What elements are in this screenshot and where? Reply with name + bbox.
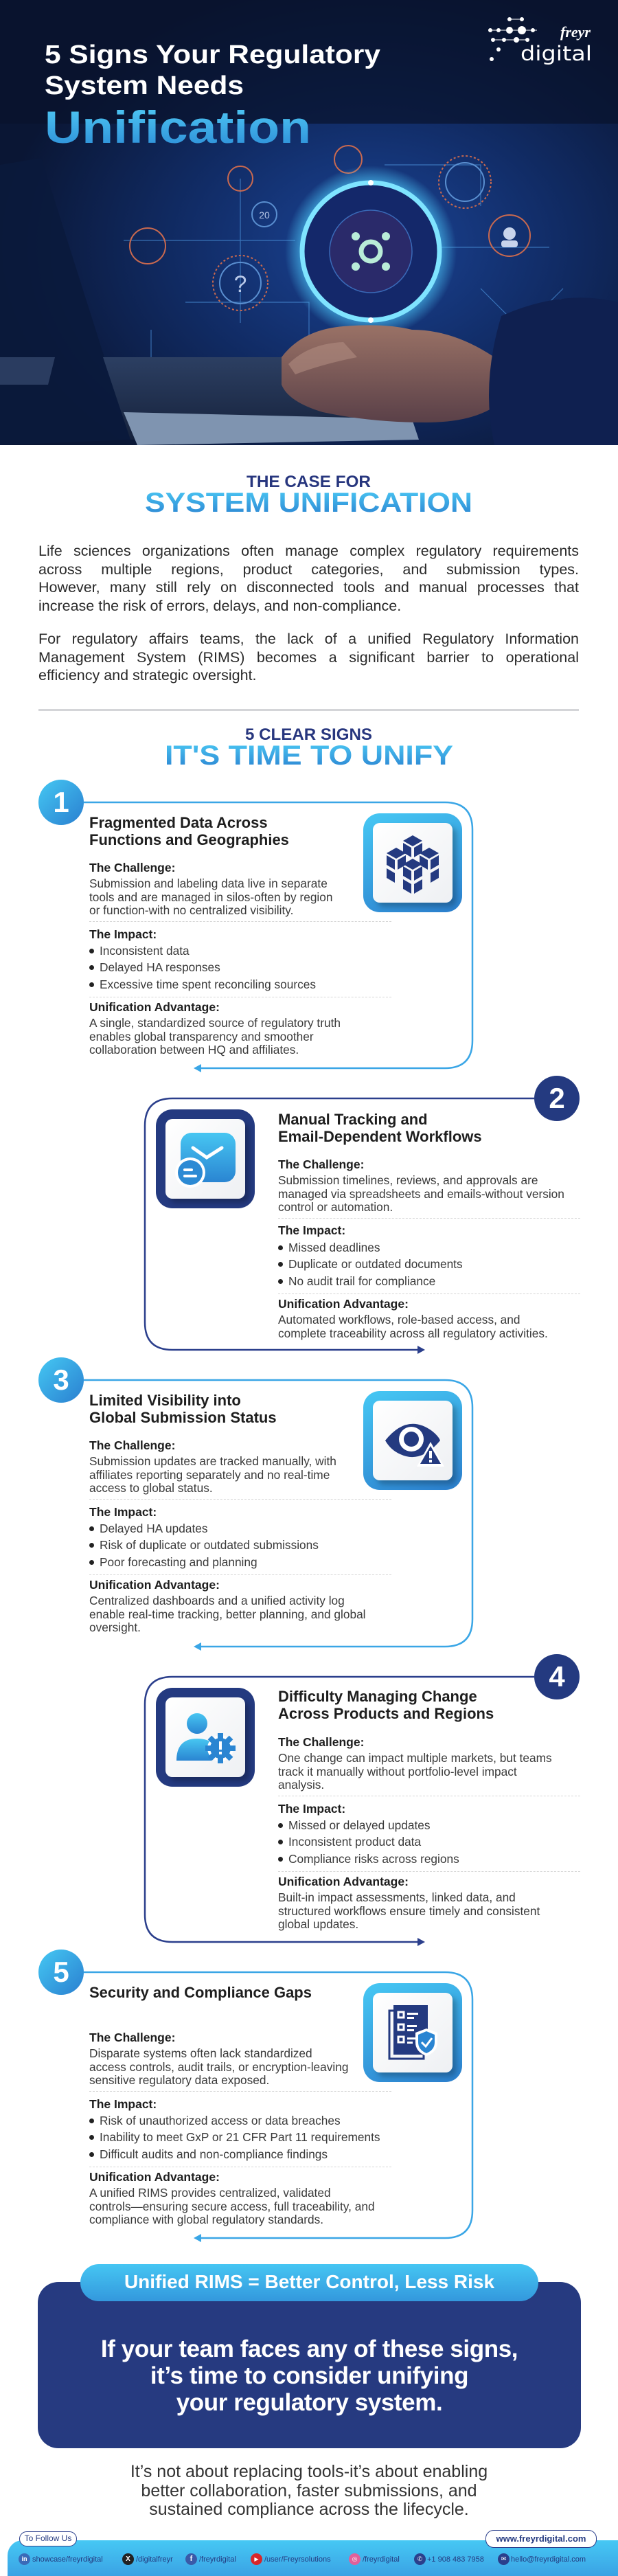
card 4: managing change [144,1654,580,1946]
pill: unified rims [80,2264,538,2301]
to follow us pill: To Follow Us [25,2533,71,2543]
contact row: ▶ [254,2556,259,2562]
challenge: The Challenge: [89,1438,175,1452]
impact: The Impact: [278,1223,345,1237]
card 2: manual tracking: Duplicate or outdated documents [288,1257,463,1271]
card 5: security gaps: access controls, audit trails, or encryption-leaving [89,2059,348,2073]
intro paragraph 2: efficiency and strategic oversight. [38,667,257,683]
card 1: fragmented data: Inconsistent data [100,944,190,958]
header hero image: ? [234,271,247,297]
logo: freyr [560,23,591,41]
number badge 1 [38,780,84,825]
intro paragraph 1: However, many still rely on disconnected tools and manual processes that [38,579,579,596]
contact row: +1 908 483 7958 [427,2555,484,2564]
challenge: The Challenge: [278,1735,364,1749]
contact row [19,2553,586,2565]
card 4: managing change: Built-in impact assessments, linked data, and [278,1890,516,1904]
card 5: security gaps: Disparate systems often lack standardized [89,2046,312,2060]
card 4: managing change: analysis. [278,1778,324,1792]
small icon circles [130,146,586,346]
closing statement [130,2462,488,2519]
conclusion text: If your team faces any of these signs, [101,2336,518,2362]
card 3: limited visibility [38,1357,474,1651]
title [278,1111,482,1144]
card 5: security gaps: compliance with global regulatory standards. [89,2213,323,2226]
logo [488,17,592,65]
contact row: /digitalfreyr [136,2555,173,2564]
title [89,814,289,848]
number badge 4 [534,1654,580,1699]
heading: 5 clear signs: 5 CLEAR SIGNS [245,725,372,744]
card 5: security gaps: sensitive regulatory data exposed. [89,2073,269,2087]
contact row: f [190,2555,192,2563]
card 1: fragmented data: A single, standardized source of regulatory truth [89,1016,341,1030]
card 2: manual tracking: complete traceability across all regulatory activities. [278,1326,548,1340]
contact row: ✉ [501,2555,506,2562]
to follow us pill [19,2531,77,2546]
icon: cubes [363,813,462,912]
title: Difficulty Managing Change [278,1688,477,1705]
conclusion text [101,2336,518,2416]
title: Functions and Geographies [89,831,289,848]
number badge 2 [534,1076,580,1121]
laptop keyboard [103,357,412,440]
card 4: managing change: Missed or delayed updates [288,1818,431,1832]
title: Fragmented Data Across [89,814,268,831]
card 4: managing change: Inconsistent product data [288,1835,421,1849]
contact row: /user/Freyrsolutions [264,2555,331,2564]
title: Email-Dependent Workflows [278,1128,482,1144]
website pill [485,2530,597,2548]
card 4: managing change: Compliance risks across regions [288,1852,459,1866]
title: Limited Visibility into [89,1392,241,1409]
central glowing ring [285,166,457,337]
card 4: managing change: global updates. [278,1917,358,1931]
conclusion text: it’s time to consider unifying [150,2362,468,2389]
heading: the case for system unification [145,473,472,515]
card 1: fragmented data: Excessive time spent reconciling sources [100,978,316,991]
advantage: Unification Advantage: [89,2170,220,2184]
card 1: fragmented data: or function-with no centralized visibility. [89,903,293,917]
card 1: fragmented data [38,780,474,1072]
card 3: limited visibility: enable real-time tracking, better planning, and global [89,1607,366,1621]
card 3: limited visibility: oversight. [89,1620,141,1634]
impact: The Impact: [278,1802,345,1816]
closing statement: It’s not about replacing tools-it’s about enabling [130,2462,488,2481]
card 2: manual tracking: managed via spreadsheets and emails-without version [278,1187,564,1201]
card 4: managing change: track it manually without portfolio-level impact [278,1764,517,1778]
card 5: security gaps: A unified RIMS provides centralized, validated [89,2186,331,2200]
intro paragraph 2 [38,631,579,683]
title: Manual Tracking and [278,1111,428,1128]
number badge 2: 2 [549,1082,565,1114]
intro paragraph 1: across multiple regions, product categories, and submission types. [38,561,579,578]
icon: checklist shield [363,1983,462,2082]
card 3: limited visibility: access to global status. [89,1481,213,1495]
website pill: www.freyrdigital.com [496,2533,586,2544]
card 3: limited visibility: Poor forecasting and planning [100,1555,258,1569]
pill: unified rims: Unified RIMS = Better Control, Less Risk [124,2271,494,2292]
card 2: manual tracking: Submission timelines, reviews, and approvals are [278,1173,538,1187]
card 2: manual tracking [144,1076,580,1354]
intro paragraph 1: increase the risk of errors, delays, and non-compliance. [38,598,401,614]
card 1: fragmented data: Delayed HA responses [100,960,220,974]
closing statement: better collaboration, faster submissions, and [141,2481,477,2500]
card 5: security gaps: controls—ensuring secure access, full traceability, and [89,2200,375,2213]
card 3: limited visibility: Centralized dashboards and a unified activity log [89,1594,345,1607]
impact: The Impact: [89,927,157,941]
title: Global Submission Status [89,1408,277,1426]
card 3: limited visibility: Submission updates are tracked manually, with [89,1454,336,1468]
contact row: in [22,2555,27,2562]
conclusion text: your regulatory system. [176,2389,442,2416]
number badge 3: 3 [53,1364,69,1396]
logo: digital [520,42,592,65]
challenge: The Challenge: [89,2031,175,2044]
advantage: Unification Advantage: [278,1297,409,1311]
contact row: /freyrdigital [363,2555,400,2564]
impact: The Impact: [89,2097,157,2111]
card 1: fragmented data: enables global transparency and smoother [89,1029,314,1043]
title: Unification [45,102,311,152]
title [278,1688,494,1721]
card 3: limited visibility: Delayed HA updates [100,1522,208,1535]
card 5: security gaps [38,1950,474,2242]
header hero image: 20 [259,210,270,221]
advantage: Unification Advantage: [278,1875,409,1888]
contact row: ✆ [417,2555,422,2562]
card 5: security gaps: Inability to meet GxP or 21 CFR Part 11 requirements [100,2130,380,2144]
card 2: manual tracking: Automated workflows, role-based access, and [278,1313,520,1326]
contact row: X [126,2555,130,2563]
intro paragraph 1 [38,543,579,614]
card 2: manual tracking: control or automation. [278,1200,393,1214]
number badge 1: 1 [53,786,69,818]
card 1: fragmented data: tools and are managed in silos-often by region [89,890,332,904]
title: Security and Compliance Gaps [89,1984,312,2001]
closing statement: sustained compliance across the lifecycle. [149,2500,469,2519]
card 4: managing change: structured workflows ensure timely and consistent [278,1904,540,1918]
impact: The Impact: [89,1505,157,1519]
heading: 5 clear signs [165,725,453,768]
contact row: showcase/freyrdigital [32,2555,103,2564]
sleeve right [489,297,618,445]
icon: email [156,1109,255,1208]
challenge: The Challenge: [278,1157,364,1171]
card 1: fragmented data: collaboration between HQ and affiliates. [89,1043,299,1057]
intro paragraph 2: Management System (RIMS) becomes a significant barrier to operational [38,649,579,666]
icon: eye warning [363,1391,462,1490]
card 3: limited visibility: Risk of duplicate or outdated submissions [100,1538,319,1552]
intro paragraph 2: For regulatory affairs teams, the lack of a unified Regulatory Information [38,631,579,647]
network lines [124,165,563,398]
number badge 5 [38,1950,84,1995]
title: Across Products and Regions [278,1705,494,1721]
card 2: manual tracking: No audit trail for compliance [288,1274,435,1288]
heading: the case for system unification: THE CASE FOR [247,473,371,491]
title [89,1392,277,1426]
card 1: fragmented data: Submission and labeling data live in separate [89,877,328,890]
conclusion box [38,2264,581,2448]
number badge 5: 5 [53,1956,69,1988]
footer [8,2530,618,2576]
laptop screen back left [0,158,130,445]
card 3: limited visibility: affiliates reporting separately and no real-time [89,1467,330,1481]
contact row: ◎ [352,2555,357,2562]
card 2: manual tracking: Missed deadlines [288,1241,380,1254]
card 5: security gaps: Difficult audits and non-compliance findings [100,2147,328,2161]
title: System Needs [45,71,244,100]
title [45,41,380,152]
header hero image [0,0,618,445]
hands [282,325,505,422]
number badge 3 [38,1357,84,1403]
advantage: Unification Advantage: [89,1578,220,1592]
title: 5 Signs Your Regulatory [45,41,380,69]
icon: person with gear [156,1688,255,1787]
card 5: security gaps: Risk of unauthorized access or data breaches [100,2114,341,2127]
advantage: Unification Advantage: [89,1000,220,1014]
contact row: hello@freyrdigital.com [511,2555,586,2564]
intro paragraph 1: Life sciences organizations often manage complex regulatory requirements [38,543,579,559]
card 4: managing change: One change can impact multiple markets, but teams [278,1751,552,1765]
challenge: The Challenge: [89,861,175,874]
contact row: /freyrdigital [199,2555,236,2564]
number badge 4: 4 [549,1660,565,1693]
